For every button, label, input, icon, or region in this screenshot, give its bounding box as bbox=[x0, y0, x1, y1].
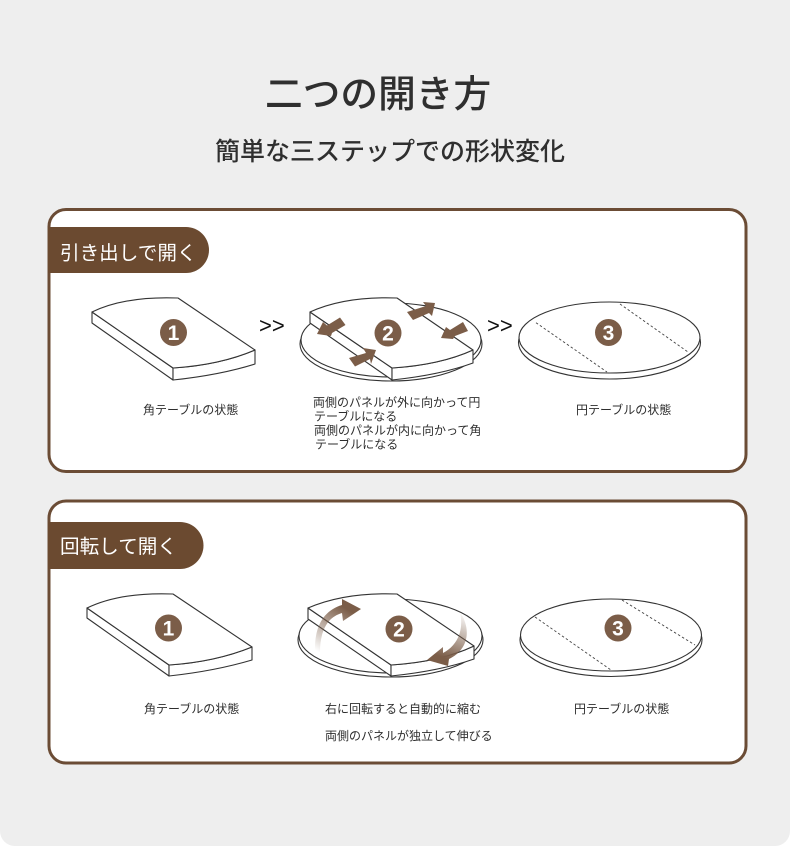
badge 2 bbox=[386, 616, 412, 642]
curved arrow: down left bbox=[427, 612, 467, 666]
badge 1: 1 bbox=[163, 618, 175, 640]
curved arrow: up right bbox=[315, 599, 361, 652]
caption 2: テーブルになる bbox=[315, 436, 398, 452]
badge 2 bbox=[374, 320, 402, 346]
heading tag: rotate: 回転して開く bbox=[60, 536, 177, 558]
heading tag: rotate bbox=[48, 522, 204, 569]
badge 3 bbox=[604, 614, 632, 642]
title: 二つの開き方 bbox=[265, 73, 491, 115]
caption 3: 円テーブルの状態 bbox=[576, 402, 671, 417]
panel: rotating opening bbox=[48, 501, 746, 763]
subtitle: 簡単な三ステップでの形状変化 bbox=[215, 138, 565, 166]
step 2: table with panels sliding out bbox=[300, 298, 482, 381]
heading tag: pull-out bbox=[48, 227, 209, 273]
arrow: next step 1: >> bbox=[259, 313, 285, 338]
arrow: left panel in bbox=[349, 348, 376, 366]
caption 2: 右に回転すると自動的に縮む bbox=[325, 701, 481, 716]
badge 3: 3 bbox=[603, 322, 614, 345]
arrow: right panel in bbox=[441, 322, 468, 339]
arrow: next step 2: >> bbox=[487, 313, 513, 338]
panel: pull-out opening bbox=[48, 210, 746, 472]
caption 2 bbox=[313, 394, 481, 452]
badge 1 bbox=[155, 614, 182, 642]
badge 2: 2 bbox=[382, 322, 394, 346]
caption 2 bbox=[325, 701, 493, 743]
arrow: right panel out bbox=[407, 302, 435, 320]
step 2: table rotating open bbox=[298, 594, 483, 677]
step 3: round table bbox=[520, 599, 702, 676]
step 1: corner table bbox=[87, 594, 252, 676]
badge 2: 2 bbox=[393, 618, 405, 642]
caption 1: 角テーブルの状態 bbox=[143, 402, 238, 417]
arrow: left panel out bbox=[317, 318, 346, 336]
caption 2: テーブルになる bbox=[314, 408, 397, 424]
caption 2: 両側のパネルが外に向かって円 bbox=[313, 394, 480, 410]
caption 3: 円テーブルの状態 bbox=[574, 701, 669, 716]
badge 3: 3 bbox=[612, 618, 624, 640]
caption 2: 両側のパネルが独立して伸びる bbox=[325, 728, 493, 743]
caption 2: 両側のパネルが内に向かって角 bbox=[314, 422, 481, 438]
badge 3 bbox=[595, 319, 622, 346]
badge 1: 1 bbox=[168, 322, 180, 345]
badge 1 bbox=[160, 319, 187, 346]
step 3: round table bbox=[518, 302, 700, 379]
caption 1: 角テーブルの状態 bbox=[144, 701, 239, 716]
heading tag: pull-out: 引き出しで開く bbox=[60, 242, 197, 264]
step 1: corner table bbox=[92, 298, 255, 380]
